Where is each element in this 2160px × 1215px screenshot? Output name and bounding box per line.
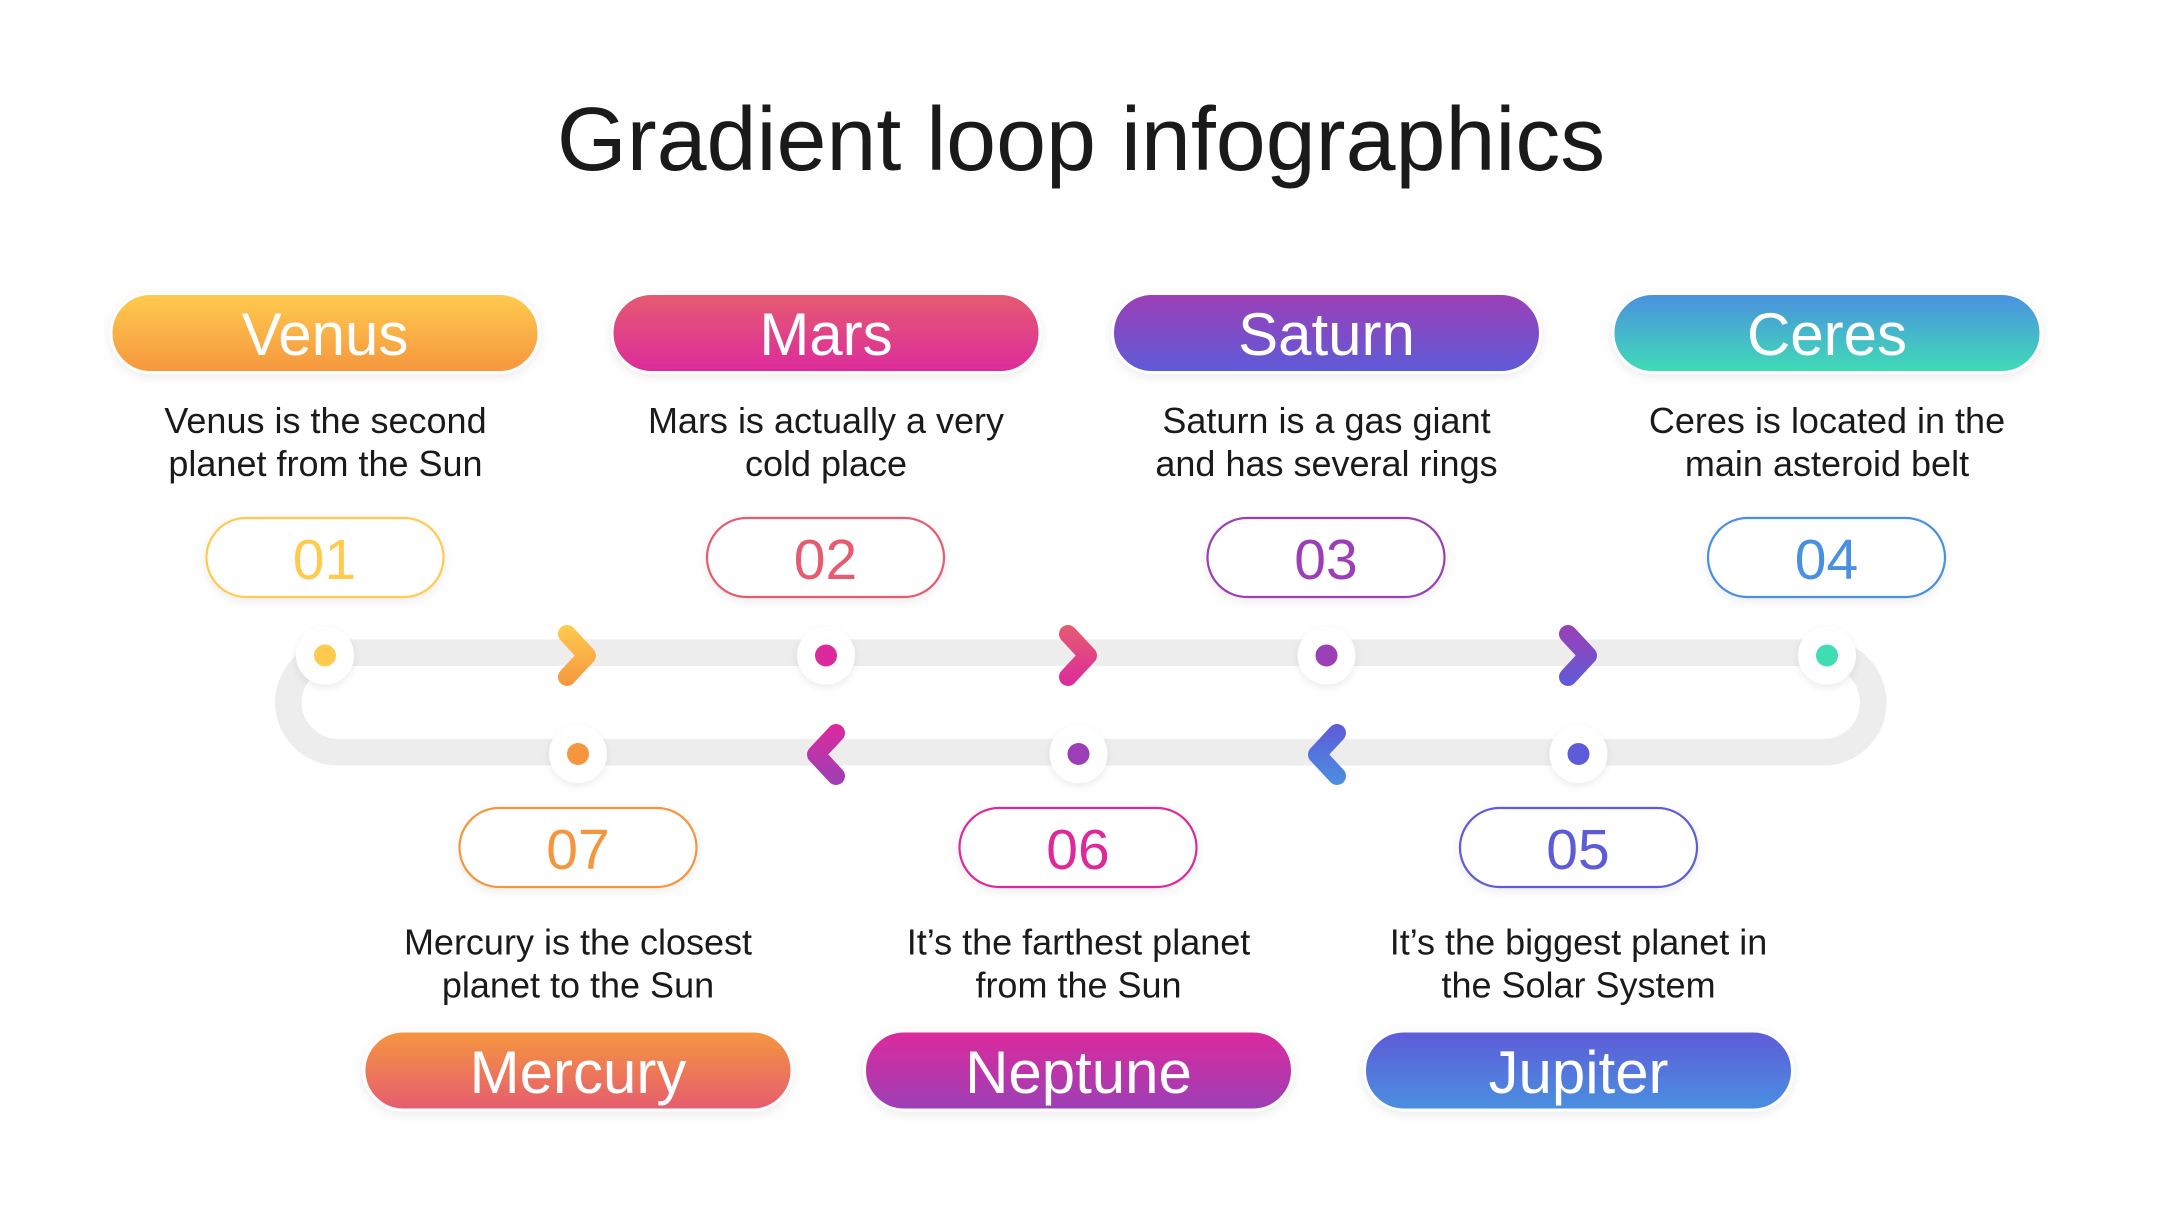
text: Neptune description: It’s the farthest planet [907, 922, 1250, 962]
node 04 [1798, 626, 1856, 684]
panel: Neptune [864, 808, 1292, 1110]
loop track [288, 653, 1873, 752]
heading: Saturn [1112, 294, 1540, 372]
text: Venus description: Venus is the second [164, 400, 487, 441]
number 05 [1460, 808, 1697, 887]
panel: Ceres [1613, 294, 2041, 597]
heading: Jupiter: Jupiter [1488, 1039, 1669, 1106]
text: Mars description: cold place [745, 443, 907, 484]
number 06 [960, 808, 1196, 887]
arrow: Mars to Saturn [1068, 634, 1088, 677]
text: Ceres description: Ceres is located in the [1649, 400, 2005, 441]
panel: Mars [612, 294, 1040, 597]
number 02: 02 [794, 528, 857, 592]
heading: Venus [111, 294, 539, 372]
number 02 [707, 518, 944, 597]
text: Jupiter description: the Solar System [1441, 964, 1716, 1006]
number 01 [206, 518, 444, 597]
heading: Ceres [1613, 294, 2041, 372]
heading: Venus: Venus [242, 301, 408, 368]
panel: Venus [111, 294, 539, 597]
node 03 [1298, 626, 1356, 684]
heading: Neptune: Neptune [965, 1039, 1192, 1106]
heading: Mercury: Mercury [470, 1039, 686, 1106]
arrow: Saturn to Ceres [1568, 634, 1588, 677]
text: Saturn description: Saturn is a gas giant [1162, 400, 1491, 441]
number 07 [460, 808, 696, 887]
text: Mars description: Mars is actually a very [648, 400, 1004, 441]
text: Mercury description: planet to the Sun [442, 964, 714, 1006]
heading: Mars [612, 294, 1040, 372]
node 06 [1050, 725, 1108, 783]
number 05: 05 [1546, 818, 1610, 882]
text: Ceres description: main asteroid belt [1685, 443, 1969, 484]
panel: Saturn [1112, 294, 1540, 597]
arrow: Neptune to Mercury [816, 733, 836, 776]
panel: Jupiter [1364, 808, 1792, 1110]
heading: Mars: Mars [759, 301, 893, 368]
panel: Mercury [364, 808, 792, 1110]
number 04 [1708, 518, 1945, 597]
node 07 [549, 725, 607, 783]
text: Saturn description: and has several rings [1155, 443, 1498, 484]
number 07: 07 [546, 818, 610, 882]
node 02 [797, 626, 855, 684]
text: Neptune description: from the Sun [975, 964, 1182, 1006]
number 06: 06 [1046, 818, 1110, 882]
number 01: 01 [293, 528, 356, 592]
text: Venus description: planet from the Sun [168, 443, 483, 484]
arrow: Jupiter to Neptune [1317, 733, 1337, 776]
text: Jupiter description: It’s the biggest planet in [1390, 922, 1767, 962]
heading: Mercury [364, 1031, 792, 1110]
heading: Neptune [864, 1031, 1292, 1110]
heading: Jupiter [1364, 1031, 1792, 1110]
node 05 [1550, 725, 1608, 783]
node 01 [296, 626, 354, 684]
heading: Ceres: Ceres [1747, 301, 1907, 368]
arrow: Venus to Mars [567, 634, 587, 677]
title: Gradient loop infographics [557, 90, 1605, 190]
text: Mercury description: Mercury is the closest [404, 922, 752, 962]
heading: Saturn: Saturn [1238, 301, 1415, 368]
number 03 [1208, 518, 1444, 597]
number 03: 03 [1294, 528, 1358, 592]
number 04: 04 [1795, 528, 1858, 592]
